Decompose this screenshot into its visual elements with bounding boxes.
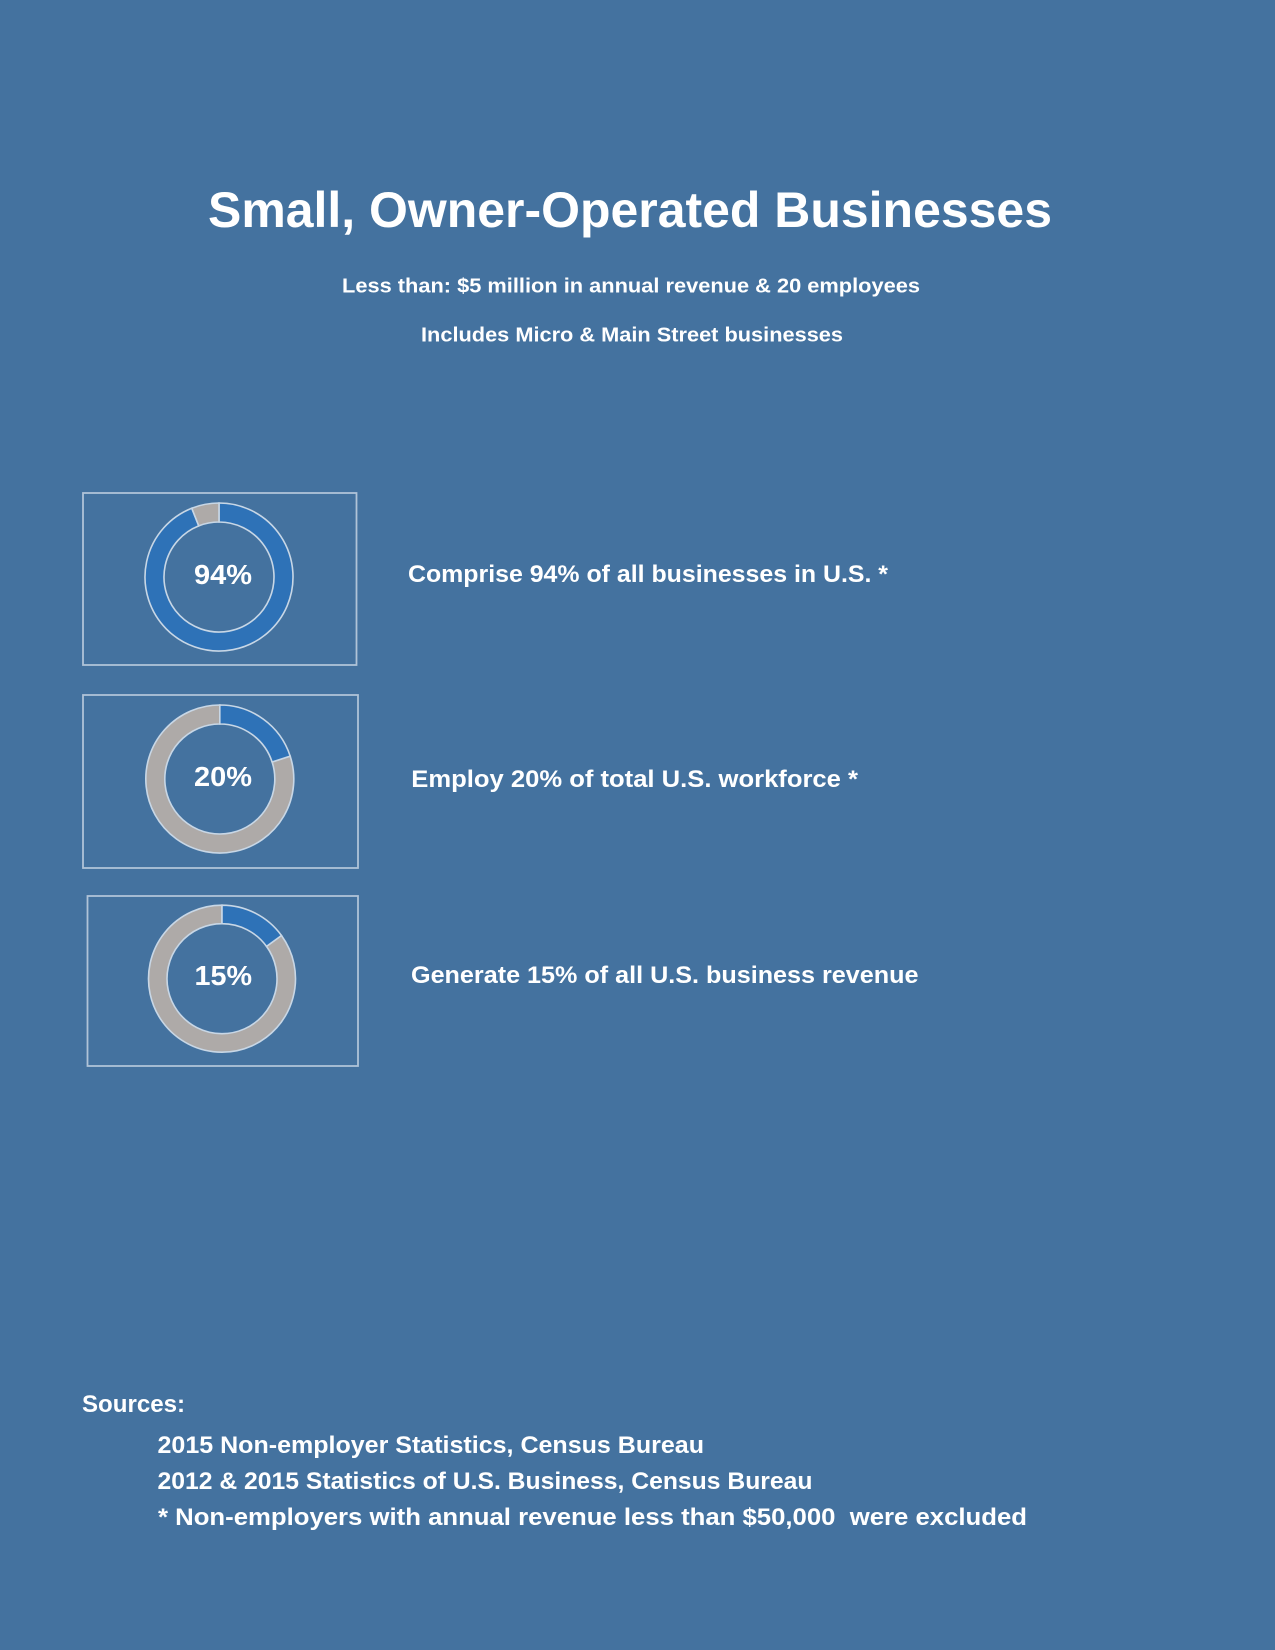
donut value: 94%: 94% [194,559,252,590]
title: Small, Owner-Operated Businesses [208,182,1052,238]
subtitle: included business types: Includes Micro & Main Street businesses [421,324,843,346]
donut value: 20%: 20% [194,761,252,792]
sources heading: Sources: [82,1391,185,1418]
source line: non-employer statistics: 2015 Non-employer Statistics, Census Bureau [158,1432,704,1459]
source line: statistics of U.S. business: 2012 & 2015 Statistics of U.S. Business, Census Bureau [158,1468,812,1495]
donut chart: 15% [148,905,295,1052]
stat text: businesses: Comprise 94% of all businesses in U.S. * [408,561,889,588]
subtitle: size definition: Less than: $5 million in annual revenue & 20 employees [342,276,920,298]
panel: 15% of revenue [88,896,358,1066]
panel: 20% of workforce [83,695,358,868]
donut value: 15%: 15% [194,960,252,991]
stat text: revenue: Generate 15% of all U.S. business revenue [411,962,918,989]
panel frame: 20% [83,695,358,868]
donut chart: 94% [145,503,293,651]
panel frame: 94% [83,493,356,665]
panel frame: 15% [88,896,358,1066]
donut chart: 20% [146,705,294,853]
stat text: workforce: Employ 20% of total U.S. workforce * [411,766,859,793]
footnote: exclusion: * Non-employers with annual revenue less than $50,000 were excluded [158,1504,1027,1531]
panel: 94% of businesses [83,493,356,665]
